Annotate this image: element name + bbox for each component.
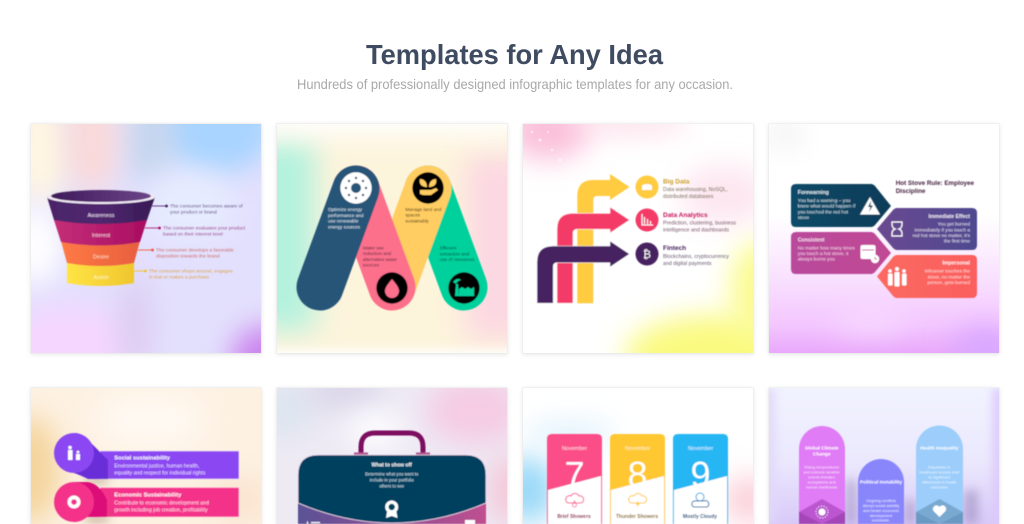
panel: weather calendar card xyxy=(522,388,754,524)
arrow: fintech xyxy=(537,241,630,303)
pill: global climate change: Global Climate xyxy=(805,446,839,452)
date card: November 7: 7 xyxy=(564,454,585,495)
pill labels: sustainably xyxy=(405,219,429,224)
pill labels: reduction and xyxy=(363,251,391,256)
block: social sustainability: Social sustainability xyxy=(114,455,171,461)
block: forewarning: stove xyxy=(798,215,809,221)
arrow labels: Data Analytics xyxy=(663,212,708,219)
pill: global climate change: human livelihoods xyxy=(806,484,837,489)
pill: political instability: and hinder economic xyxy=(863,508,899,513)
icon: water drop xyxy=(376,272,408,304)
pill: health inequality: outcomes xyxy=(931,484,948,489)
icon: sun xyxy=(340,172,372,204)
pill: health inequality: Health Inequality xyxy=(920,446,959,452)
pill labels: Water use xyxy=(363,245,384,250)
briefcase body: What to show off xyxy=(372,462,412,468)
pill labels: sources xyxy=(363,263,380,268)
arrow labels xyxy=(663,178,736,267)
funnel callouts: The consumer shops around, engages xyxy=(149,268,233,274)
pill: global climate change: events threaten xyxy=(808,474,835,479)
pill: political instability: Ongoing conflicts xyxy=(866,498,896,503)
block: economic sustainability xyxy=(54,482,239,524)
arrow labels: Big Data xyxy=(663,178,690,186)
flap details xyxy=(307,520,475,524)
block: immediate effect: the first time xyxy=(944,239,970,245)
block: immediate effect: immediately if you touch a xyxy=(915,227,970,233)
panel: funnel template card xyxy=(30,124,262,356)
panel: arrows data card xyxy=(522,124,754,356)
date card: November 9: Mostly Cloudy xyxy=(683,514,717,520)
arrow labels: Prediction, clustering, business xyxy=(663,221,736,227)
pill: political instability xyxy=(858,459,904,524)
date card: November 8: Thunder Showers xyxy=(616,514,658,520)
arrow labels: Blockchains, cryptocurrency xyxy=(663,254,729,260)
block: forewarning xyxy=(791,184,891,227)
date card: November 8 xyxy=(610,434,665,524)
pill labels: Optimize energy xyxy=(328,207,363,212)
pill: health inequality: to significant xyxy=(928,474,951,479)
pill labels: alternative water xyxy=(363,257,398,262)
date card: November 9 xyxy=(673,434,728,524)
pill: political instability: development xyxy=(870,513,893,518)
pill labels: extraction and xyxy=(440,251,470,256)
pill: political instability: disrupt social stability xyxy=(863,503,899,508)
panel: sustainability card xyxy=(30,388,262,524)
block: impersonal: Whoever touches the xyxy=(925,269,970,275)
heading: hot stove rule: Discipline xyxy=(896,188,926,195)
block: immediate effect: red hot stove no matter, it's xyxy=(913,233,971,239)
funnel callouts: in trial or makes a purchase xyxy=(149,274,209,280)
icon: factory xyxy=(448,272,480,304)
icon: bitcoin: ₿ xyxy=(643,249,651,261)
date card: November 7 xyxy=(547,434,602,524)
block: impersonal: stove, no matter the xyxy=(928,274,970,280)
briefcase body xyxy=(298,455,486,524)
block: economic sustainability: Economic Sustainability xyxy=(114,492,182,498)
icon: data analytics xyxy=(636,208,658,232)
funnel callouts: The consumer develops a favorable xyxy=(156,248,234,254)
funnel chart: Action xyxy=(93,275,109,281)
block: immediate effect xyxy=(877,208,977,250)
icon: big data xyxy=(636,176,658,198)
pill: political instability: worldwide. xyxy=(872,518,890,523)
icon: award badge xyxy=(385,500,398,518)
heading: hot stove rule xyxy=(896,180,975,195)
date card: November 8: 8 xyxy=(627,454,648,495)
funnel callouts: The consumer evaluates your product xyxy=(163,226,246,232)
briefcase body: Determine what you want to xyxy=(365,471,419,476)
arrow labels: and digital payments xyxy=(663,261,712,267)
pill labels: spaces xyxy=(405,213,421,218)
date card: November 7: Brief Showers xyxy=(557,514,591,520)
funnel callouts: The consumer becomes aware of xyxy=(170,204,243,210)
pill labels xyxy=(328,207,475,268)
block: impersonal xyxy=(877,255,977,298)
funnel chart: Awareness xyxy=(87,213,115,219)
block: forewarning: you touched the red hot xyxy=(798,209,849,215)
block: impersonal: Impersonal xyxy=(942,260,971,266)
arrow labels: Fintech xyxy=(663,245,686,252)
pill labels: use of resources xyxy=(440,257,475,262)
pill: political instability: Political Instability xyxy=(860,479,902,485)
pill labels: energy sources xyxy=(328,224,361,229)
funnel callouts xyxy=(134,204,246,280)
funnel chart: Interest xyxy=(92,233,111,239)
block: immediate effect: Immediate Effect xyxy=(928,214,970,220)
block: forewarning: Forewarning xyxy=(798,190,829,196)
M pills xyxy=(320,189,464,287)
arrow labels: Data warehousing, NoSQL, xyxy=(663,187,727,193)
briefcase body: include in your portfolio xyxy=(370,477,414,482)
block: economic sustainability: Contribute to economic development and xyxy=(114,500,209,506)
icon: plant in hand xyxy=(412,172,444,204)
arrow labels: distributed databases xyxy=(663,194,714,200)
block: consistent: always burns you xyxy=(798,257,835,263)
heading: hot stove rule: Hot Stove Rule: Employee xyxy=(896,180,975,187)
block: consistent xyxy=(791,232,891,274)
funnel chart: Desire xyxy=(93,254,109,260)
subtitle: Hundreds of professionally designed infographic templates for any occasion. xyxy=(297,76,733,92)
arrow: data analytics xyxy=(557,207,630,303)
arrow: big data xyxy=(577,174,630,303)
panel: M-shaped sustainability card xyxy=(276,124,508,356)
title: Templates for Any Idea xyxy=(366,39,664,70)
block: economic sustainability: growth including job creation, profitability xyxy=(114,508,208,514)
funnel callouts: based on their interest level xyxy=(163,232,223,238)
pill labels: performance and xyxy=(328,213,364,218)
pill: health inequality: Disparities in xyxy=(928,464,950,469)
panel: portfolio briefcase card xyxy=(276,388,508,524)
pill: health inequality xyxy=(916,426,963,524)
block: immediate effect: You get burned xyxy=(938,222,970,228)
pill: global climate change: and extreme weather xyxy=(803,469,841,474)
block: forewarning: knew what would happen if xyxy=(798,204,856,210)
pill: global climate change xyxy=(799,426,845,524)
funnel callouts: your product or brand xyxy=(170,210,217,216)
pill: health inequality: healthcare access lead xyxy=(919,469,959,474)
pill: global climate change: Rising temperatures xyxy=(804,464,839,469)
date card: November 7: November xyxy=(562,446,587,452)
date card: November 9: 9 xyxy=(690,454,711,495)
panel: global issues card xyxy=(763,388,1005,524)
pill labels: Efficient xyxy=(440,245,457,250)
block: consistent: Consistent xyxy=(798,237,825,243)
icon: bitcoin xyxy=(636,242,658,266)
block: social sustainability: equality and respect for individual rights xyxy=(114,470,206,476)
block: impersonal: person, gets burned xyxy=(927,280,970,286)
pill shadows xyxy=(846,480,978,524)
block: consistent: No matter how many times xyxy=(798,245,855,251)
briefcase body: others to see xyxy=(379,483,405,488)
funnel chart xyxy=(47,190,155,286)
date card: November 9: November xyxy=(688,446,713,452)
pill: global climate change: Change xyxy=(813,452,831,458)
briefcase handle xyxy=(354,433,430,455)
panel: hot stove rule card xyxy=(768,124,1000,356)
block: social sustainability: Environmental justice, human health, xyxy=(114,464,199,470)
pill labels: Manage land and xyxy=(405,207,442,212)
block: social sustainability xyxy=(54,433,239,484)
funnel callouts: disposition towards the brand xyxy=(156,254,220,260)
date card: November 8: November xyxy=(625,446,650,452)
block: forewarning: You had a warning – you xyxy=(798,198,851,204)
pill: health inequality: differences in health xyxy=(922,479,957,484)
pill labels: use renewable xyxy=(328,219,359,224)
block: consistent: you touch a hot stove, it xyxy=(798,251,849,257)
arrow labels: intelligence and dashboards xyxy=(663,228,729,234)
pill: global climate change: ecosystems and xyxy=(808,479,836,484)
